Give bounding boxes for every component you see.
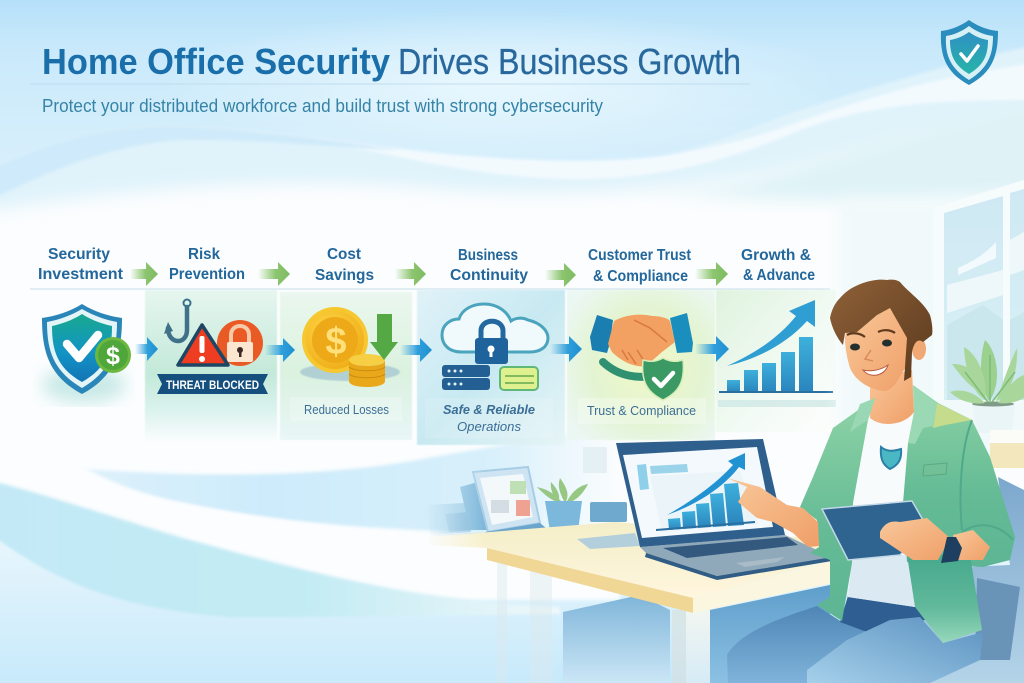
arrow: green 1 [130,262,158,286]
panel: business continuity [417,290,565,445]
smile [863,365,888,375]
pocket [923,463,947,476]
hair [830,280,932,381]
header rule [30,288,830,290]
panel: customer trust [567,290,715,440]
laptop [616,439,832,580]
person presenting [727,280,1015,683]
back monitor [460,467,546,538]
arrow: green 2 [258,262,290,286]
ribbon: threat blocked: THREAT BLOCKED [166,380,259,392]
right thigh [807,617,983,683]
title rule [30,83,750,85]
arrow: blue 1 [135,337,158,361]
faint desk legs [497,560,552,683]
chair [900,477,1024,683]
desk and office items [425,447,832,683]
arrow: green 5 [695,262,728,286]
icon: hook, warning and lock [164,300,263,366]
heading: growth and advance [741,247,815,284]
desk plant [537,478,588,528]
left thigh [727,606,867,683]
book [577,533,640,549]
neck [870,370,914,424]
icon: logo shield [941,20,998,85]
heading: risk prevention: Prevention [169,266,245,283]
jacket left [800,398,875,621]
heading: security investment: Security [48,246,110,263]
heading: business continuity: Business [458,247,518,264]
title: Home Office Security [42,41,390,82]
label: safe and reliable operations [443,402,535,434]
drawer [563,597,670,674]
label strip: operations [425,398,553,438]
arrow: blue 5 [695,336,729,362]
windowsill [990,430,1024,468]
eyes and brows [847,330,895,350]
arrow: blue 3 [400,338,432,362]
belt and hips [840,596,925,632]
label: safe and reliable operations: Safe & Reliable [443,402,535,417]
heading: business continuity: Continuity [450,267,528,284]
desk front edges [487,548,832,613]
heading: security investment [38,246,124,283]
heading: risk prevention: Risk [188,246,220,263]
pointing hand and arm [727,478,819,547]
nose [865,350,873,361]
label: trust and compliance: Trust & Compliance [587,403,696,418]
plant on windowsill [950,340,1024,433]
label strip: trust and compliance [578,398,706,424]
label: safe and reliable operations: Operations [457,419,522,434]
window [933,180,1024,400]
under-desk panel [710,585,830,683]
heading: growth and advance: & Advance [743,267,815,284]
hand on tablet [880,518,950,560]
sleeve fold [960,420,1013,540]
label strip: reduced losses [290,397,402,421]
ear [912,338,926,360]
chart: growth bars and arrow [718,300,836,407]
icon: security investment shield: $ [106,342,120,370]
tablet [822,501,927,560]
title: Drives Business Growth [398,41,741,82]
heading: cost savings [315,246,374,284]
arrow: blue 2 [265,338,295,362]
shoulder highlight [933,403,972,428]
label: reduced losses: Reduced Losses [304,402,389,417]
panel: growth [716,290,836,432]
heading: customer trust and compliance: Customer Trust [588,247,692,264]
t-shirt lower [848,555,915,607]
icon: security investment shield [42,304,131,403]
phone [430,503,486,536]
right forearm [953,530,990,560]
wall by window [840,200,1024,460]
panel: cost savings [280,292,412,440]
lapel [908,385,937,444]
watch [941,537,962,563]
shirt shield [881,447,901,469]
icon: handshake with shield [590,313,693,400]
arrow: green 4 [545,263,576,287]
face [845,305,910,391]
icon: coin and savings [300,307,400,387]
subtitle: Protect your distributed workforce and build trust with strong cybersecurity [42,96,603,116]
heading: cost savings: Savings [315,267,374,284]
blue box [590,502,627,522]
jacket lower right [907,555,982,643]
desk top [427,522,830,598]
t-shirt [848,412,915,607]
jacket right [903,385,1015,567]
heading: risk prevention [169,246,245,283]
arrow: blue 4 [550,336,582,362]
heading: customer trust and compliance: & Compliance [593,268,688,285]
heading: growth and advance: Growth & [741,247,811,264]
arrow: green 3 [395,262,426,286]
heading: customer trust and compliance [588,247,692,285]
heading: security investment: Investment [38,266,124,283]
heading: cost savings: Cost [327,246,362,263]
icon: coin and savings: $ [325,321,347,363]
ribbon: threat blocked [157,374,268,394]
icon: cloud lock and servers [442,304,548,390]
panel: risk prevention [145,290,277,442]
faint wall frame [583,447,607,473]
desk leg [672,610,710,683]
heading: business continuity [450,247,528,284]
title [42,41,741,82]
